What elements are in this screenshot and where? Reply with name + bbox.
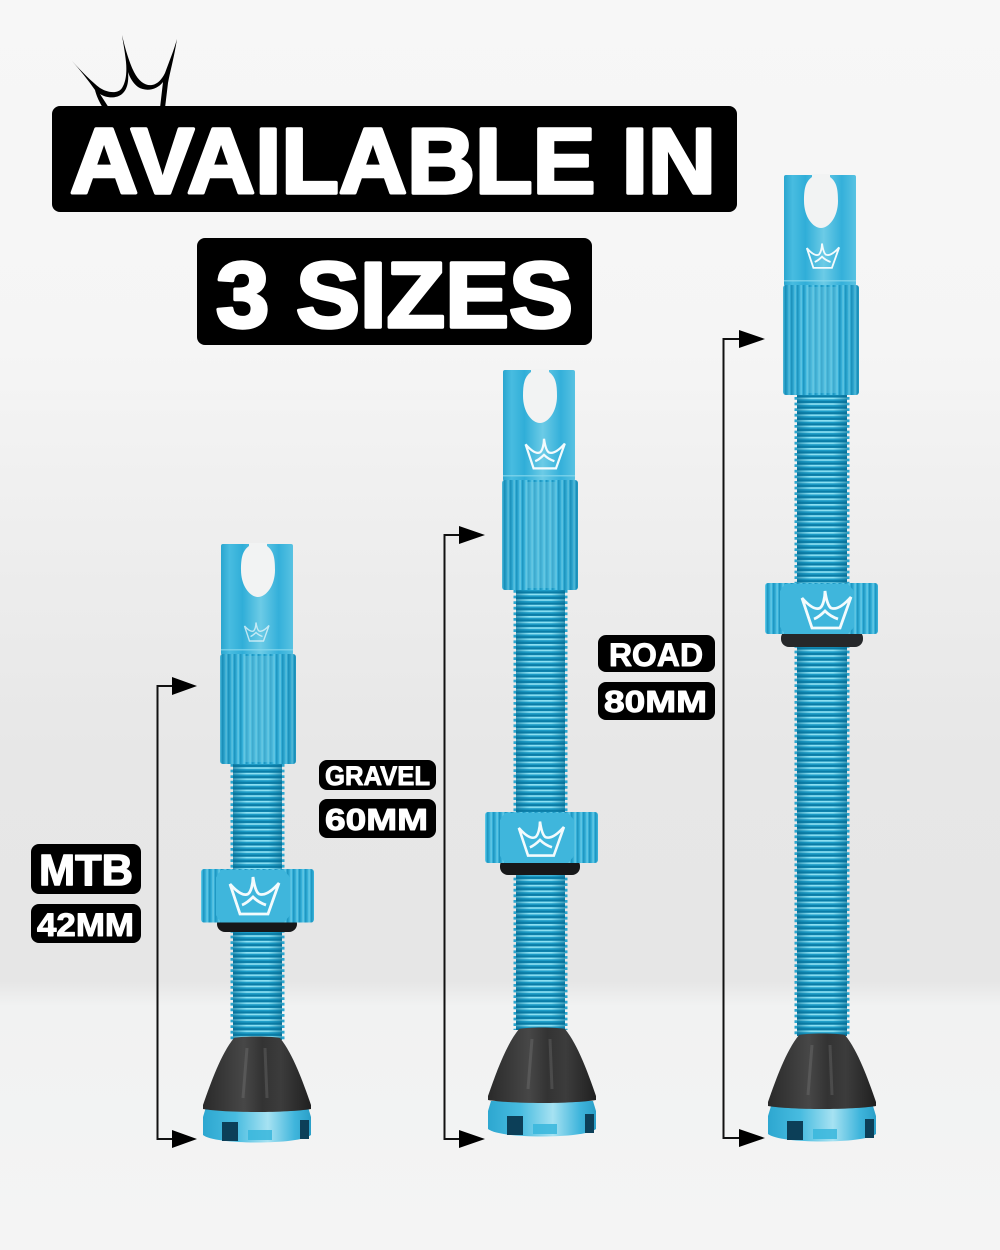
label: MTB 42mm: 42MM — [37, 907, 134, 943]
arrow: gravel height bracket — [444, 526, 485, 1148]
label: road 80mm: ROAD — [609, 637, 703, 673]
label: gravel 60mm — [319, 760, 436, 838]
label: road 80mm — [598, 635, 715, 720]
label: MTB 42mm — [31, 844, 141, 943]
label: gravel 60mm: GRAVEL — [325, 761, 430, 791]
valve: gravel 60mm — [485, 369, 598, 1136]
icon: crown logo above heading — [72, 35, 177, 108]
valve: MTB 42mm — [201, 543, 314, 1142]
label: MTB 42mm: MTB — [39, 846, 133, 895]
arrow: road height bracket — [724, 330, 765, 1147]
label: road 80mm: 80MM — [604, 684, 707, 719]
valve: road 80mm — [765, 174, 878, 1142]
heading: 3 sizes: 3 SIZES — [216, 243, 573, 347]
heading: available in: AVAILABLE IN — [70, 109, 716, 213]
label: gravel 60mm: 60MM — [325, 802, 428, 837]
arrow: MTB height bracket — [158, 677, 197, 1148]
